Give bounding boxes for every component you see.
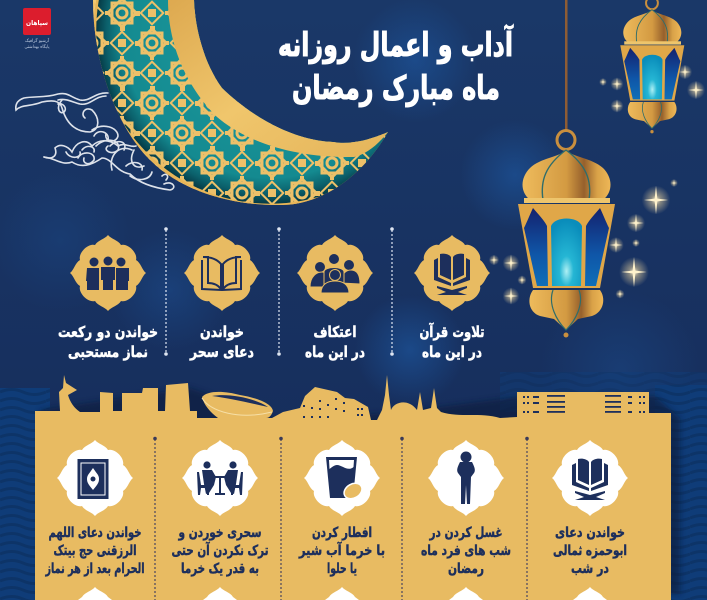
item: Abu Hamza prayer: خواندن دعای <box>555 525 625 541</box>
building details <box>303 395 645 418</box>
item: two rakats: خواندن دو رکعت <box>58 323 158 341</box>
item: recite Quran: تلاوت قرآن <box>420 323 484 341</box>
item: suhoor: سحری خوردن و <box>178 525 262 541</box>
item: iftar: افطار کردن <box>312 525 372 541</box>
crescent moon <box>93 0 388 205</box>
cloud illustration <box>16 93 174 190</box>
item: Abu Hamza prayer: در شب <box>571 561 609 577</box>
item: suhoor: به قدر یک خرما <box>181 561 259 577</box>
item: Abu Hamza prayer: ابوحمزه ثمالی <box>553 543 627 559</box>
title <box>278 24 513 107</box>
item: ghusl: شب های فرد ماه <box>421 543 511 559</box>
hanging string <box>565 0 568 131</box>
item: Abu Hamza prayer <box>552 440 628 577</box>
item: ghusl: غسل کردن در <box>429 525 502 541</box>
item: Hajj prayer: الحرام بعد از هر نماز <box>45 561 144 577</box>
item: itikaf: در این ماه <box>305 343 365 361</box>
logo: آرشیو گرافیک <box>25 37 50 44</box>
item: iftar <box>298 440 385 577</box>
item: sahar prayer: خواندن <box>200 323 244 341</box>
water texture <box>0 372 707 600</box>
item: iftar: با خرما آب شیر <box>298 541 385 559</box>
item: suhoor: ترک نکردن آن حتی <box>172 541 268 559</box>
title: ماه مبارک رمضان <box>292 68 500 107</box>
item: ghusl: رمضان <box>448 561 484 577</box>
logo <box>23 8 51 50</box>
item: sahar prayer: دعای سحر <box>189 343 254 361</box>
separators: bottom row <box>155 439 527 600</box>
item: sahar prayer <box>184 235 260 361</box>
item: two rakats <box>58 235 158 361</box>
item: iftar: یا حلوا <box>327 561 357 577</box>
item: recite Quran <box>414 235 490 361</box>
item: ghusl <box>421 440 511 577</box>
inner gold band <box>168 0 388 157</box>
sparkles <box>489 65 705 304</box>
item: Hajj prayer: خواندن دعای اللهم <box>48 525 142 541</box>
item: itikaf <box>297 235 373 361</box>
logo: سپاهان <box>26 19 48 27</box>
title: آداب و اعمال روزانه <box>278 24 513 65</box>
next row icons, top edges <box>78 587 607 600</box>
item: suhoor <box>172 440 268 577</box>
item: Hajj prayer <box>45 440 144 577</box>
gold skyline panel <box>35 375 671 600</box>
item: itikaf: اعتکاف <box>314 323 356 341</box>
separators: top row <box>166 230 392 354</box>
item: Hajj prayer: الرزقنی حج بیتک <box>54 543 136 559</box>
panel shadow <box>40 388 680 594</box>
large lantern <box>518 130 615 338</box>
logo: پایگاه بهداشتی <box>24 43 50 50</box>
small lantern <box>620 0 684 133</box>
item: two rakats: نماز مستحبی <box>68 343 148 361</box>
item: recite Quran: در این ماه <box>422 343 482 361</box>
